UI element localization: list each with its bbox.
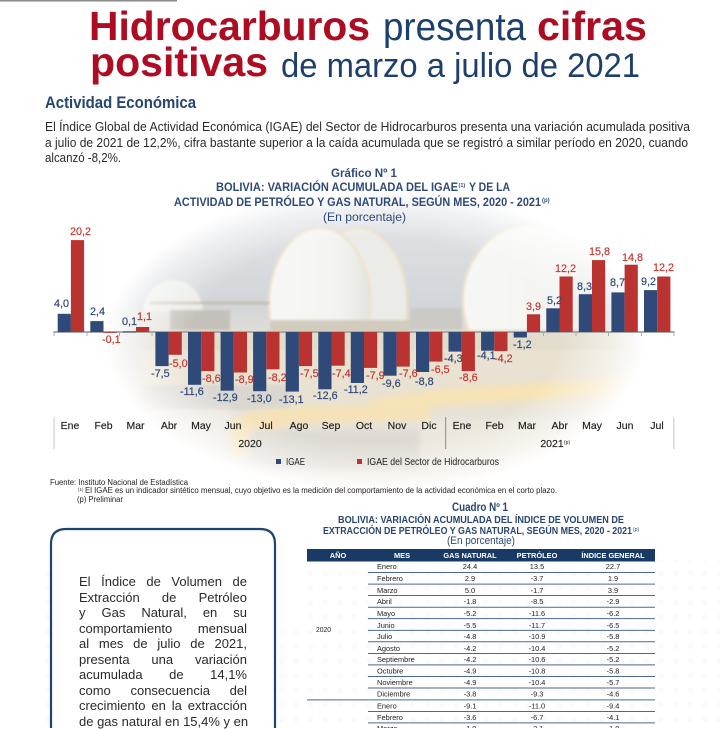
- month axis labels: Abr: [161, 420, 178, 432]
- table header: MES: [394, 551, 410, 560]
- IGAE value labels: -12,6: [313, 390, 338, 402]
- rows: -1.8: [464, 597, 476, 606]
- rows: -3.6: [464, 713, 476, 722]
- month axis labels: Ene: [61, 420, 79, 432]
- rows: -1.7: [531, 586, 543, 595]
- IGAE value labels: 8,7: [610, 277, 625, 289]
- rows: -5.8: [607, 666, 619, 676]
- sector value labels: -8,6: [459, 372, 478, 384]
- rows: -5.2: [607, 655, 619, 664]
- table header: GAS NATURAL: [443, 551, 497, 560]
- title: de marzo a julio de 2021: [281, 47, 640, 85]
- text box: Índice de Volumen: al mes de julio de 2021,: [79, 636, 247, 651]
- sector value labels: 20,2: [70, 226, 91, 238]
- IGAE value labels: 0,1: [122, 316, 137, 328]
- title: Hidrocarburos: [89, 3, 370, 49]
- text box: Índice de Volumen: crecimiento en la extracción: [79, 698, 247, 713]
- rows: -10.4: [529, 644, 545, 653]
- rows: -11.6: [529, 609, 545, 618]
- rows: -8.5: [531, 597, 543, 606]
- rows: -2.9: [607, 597, 619, 606]
- rows: Junio: [377, 621, 395, 630]
- rows: [377, 562, 620, 729]
- month axis labels: Oct: [356, 420, 372, 432]
- sector value labels: -8,9: [235, 374, 254, 386]
- rows: -9.4: [607, 702, 619, 710]
- rows: Febrero: [377, 713, 403, 722]
- month axis labels: 2020: [238, 438, 262, 450]
- chart heading: BOLIVIA: VARIACIÓN ACUMULADA DEL IGAE: [216, 179, 458, 194]
- rows: -6.7: [531, 713, 543, 722]
- rows: 13.5: [530, 562, 544, 571]
- text box: Índice de Volumen: comportamiento mensual: [79, 620, 247, 636]
- month axis labels: Ene: [453, 420, 471, 432]
- rows: Octubre: [377, 666, 403, 676]
- rows: 3.9: [608, 586, 618, 595]
- text box: Índice de Volumen: de gas natural en 15,4% y en: [79, 714, 248, 728]
- rows: Enero: [377, 702, 397, 710]
- IGAE value labels: 8,3: [577, 281, 592, 293]
- IGAE value labels: -4,1: [477, 350, 496, 362]
- IGAE value labels: -13,1: [279, 394, 304, 406]
- text box: Índice de Volumen: presenta una variación: [79, 652, 247, 666]
- sector value labels: -8,6: [202, 373, 221, 385]
- IGAE value labels: 9,2: [641, 276, 656, 288]
- sector value labels: 14,8: [622, 252, 643, 264]
- rows: 22.7: [606, 562, 620, 571]
- table header: [307, 549, 655, 562]
- rows: -9.1: [464, 702, 476, 710]
- rows: 5.0: [465, 586, 475, 595]
- month axis labels: Dic: [421, 420, 437, 432]
- month axis labels: Mar: [518, 420, 537, 432]
- month axis labels: Nov: [388, 420, 407, 432]
- source notes: [50, 478, 557, 504]
- text box: Índice de Volumen: Extracción de Petróleo: [79, 590, 247, 604]
- rows: Mayo: [377, 609, 395, 618]
- rows: Agosto: [377, 644, 400, 653]
- IGAE value labels: -12,9: [213, 392, 238, 404]
- sector value labels: -7,9: [366, 370, 385, 382]
- bar chart: IGAE vs IGAE hidrocarburos: [54, 226, 674, 468]
- sector value labels: 12,2: [555, 263, 576, 275]
- sector value labels: -4,2: [494, 353, 513, 365]
- rows: -4.6: [607, 690, 619, 698]
- sector value labels: -7,6: [399, 368, 418, 380]
- title: positivas: [90, 39, 268, 85]
- rows: Abril: [377, 597, 392, 606]
- sector value labels: [70, 226, 674, 386]
- month axis labels: Jun: [617, 420, 634, 432]
- sector value labels: -8,2: [268, 372, 287, 384]
- sector value labels: -7,5: [300, 368, 319, 380]
- rows: -4.9: [464, 678, 476, 687]
- rows: -10.8: [529, 666, 545, 676]
- month axis labels: Feb: [485, 420, 504, 432]
- table header: AÑO: [330, 551, 346, 560]
- text box: Índice de Volumen: y Gas Natural, en su: [79, 605, 247, 620]
- source notes: Fuente: Instituto Nacional de Estadística: [50, 478, 189, 487]
- IGAE value labels: 5,2: [547, 295, 562, 307]
- table heading: EXTRACCIÓN DE PETRÓLEO Y GAS NATURAL, SEGÚN MES, 2020 - 2021: [323, 524, 632, 537]
- rows: Enero: [377, 562, 397, 571]
- month axis labels: Jul: [259, 420, 273, 432]
- text box: Índice de Volumen: El Índice de Volumen de: [79, 574, 247, 589]
- chart heading: (En porcentaje): [323, 210, 406, 224]
- sector value labels: -6,5: [431, 364, 450, 376]
- rows: -4.8: [464, 632, 476, 641]
- rows: Marzo: [377, 586, 398, 595]
- rows: -6.5: [607, 621, 619, 630]
- month axis labels: (p): [564, 440, 570, 446]
- year label: 2020: [316, 625, 331, 634]
- IGAE value labels: -11,6: [180, 386, 204, 398]
- sector value labels: 1,1: [137, 311, 152, 323]
- source notes: (1): [78, 487, 84, 492]
- top rule: [0, 0, 177, 2]
- source notes: (p) Preliminar: [77, 495, 123, 504]
- rows: -11.0: [529, 702, 545, 710]
- source notes: El IGAE es un indicador sintético mensual, cuyo objetivo es la medición del comportamiento de la actividad económica en el corto plazo.: [85, 486, 557, 495]
- chart heading: ACTIVIDAD DE PETRÓLEO Y GAS NATURAL, SEGÚN MES, 2020 - 2021: [174, 194, 541, 209]
- rows: -9.3: [531, 690, 543, 698]
- month axis labels: Jul: [650, 420, 664, 432]
- rows: -5.5: [464, 621, 476, 630]
- table header: PETRÓLEO: [517, 551, 558, 560]
- IGAE value labels: -11,2: [344, 384, 368, 396]
- sector value labels: -5,0: [169, 358, 188, 370]
- rows: -4.2: [464, 644, 476, 653]
- sector value labels: -0,1: [102, 334, 121, 346]
- month axis labels: Mar: [126, 420, 145, 432]
- text box: Índice de Volumen: acumulada de 14,1%: [79, 667, 247, 682]
- rows: -3.7: [531, 574, 543, 583]
- rows: Diciembre: [377, 690, 410, 698]
- month axis labels: Ago: [290, 420, 308, 432]
- month axis labels: Abr: [552, 420, 568, 432]
- IGAE value labels: 4,0: [54, 298, 69, 310]
- rows: -4.2: [464, 655, 476, 664]
- chart heading: [174, 166, 550, 224]
- table heading: Cuadro Nº 1: [452, 502, 509, 514]
- rows: 1.9: [608, 574, 618, 583]
- rows: Septiembre: [377, 655, 415, 664]
- hydrocarbon sector bars: [71, 240, 670, 372]
- IGAE value labels: -4,3: [444, 353, 463, 365]
- rows: -10.6: [529, 655, 545, 664]
- data table: [307, 549, 655, 729]
- sector value labels: 12,2: [653, 262, 674, 274]
- month axis labels: Jun: [225, 420, 242, 432]
- rows: -6.2: [607, 609, 619, 618]
- table heading: [323, 502, 639, 547]
- title: cifras: [537, 3, 647, 49]
- table heading: (p): [633, 527, 639, 533]
- sector value labels: 3,9: [526, 301, 541, 313]
- intro paragraph: [45, 119, 691, 165]
- table heading: (En porcentaje): [447, 535, 515, 547]
- table heading: BOLIVIA: VARIACIÓN ACUMULADA DEL ÍNDICE DE VOLUMEN DE: [338, 513, 624, 526]
- rows: -5.2: [464, 609, 476, 618]
- rows: -11.7: [529, 621, 545, 630]
- chart heading: Gráfico Nº 1: [331, 166, 397, 180]
- IGAE value labels: -8,8: [415, 376, 434, 388]
- IGAE value labels: -7,5: [151, 368, 170, 380]
- IGAE value labels: [54, 276, 656, 406]
- month axis labels: 2021: [540, 438, 564, 450]
- intro paragraph: El Índice Global de Actividad Económica (IGAE) del Sector de Hidrocarburos presenta una variación acumulada positiva: [45, 119, 691, 134]
- rows: Febrero: [377, 574, 403, 583]
- dotted background texture: [40, 560, 720, 728]
- rows: -5.2: [607, 644, 619, 653]
- chart heading: Y DE LA: [469, 180, 510, 194]
- IGAE value labels: 2,4: [90, 306, 105, 318]
- rows: -4.9: [464, 666, 476, 676]
- rows: -10.4: [529, 678, 545, 687]
- rows: -10.9: [529, 632, 545, 641]
- legend: [276, 456, 499, 468]
- rows: -5.8: [607, 632, 619, 641]
- IGAE bars: [58, 290, 657, 392]
- table header: ÍNDICE GENERAL: [581, 551, 645, 560]
- text box: Índice de Volumen: [79, 574, 248, 728]
- text box outline: [51, 529, 275, 728]
- title: [89, 3, 647, 85]
- rows: -3.8: [464, 690, 476, 698]
- month axis labels: May: [582, 420, 603, 432]
- legend: IGAE del Sector de Hidrocarburos: [367, 456, 499, 468]
- IGAE value labels: -1,2: [513, 339, 532, 351]
- row rules: [307, 572, 655, 723]
- month axis labels: Feb: [94, 420, 113, 432]
- chart heading: (p): [542, 198, 550, 204]
- text box: Índice de Volumen: como consecuencia del: [79, 682, 247, 698]
- rows: Noviembre: [377, 678, 413, 687]
- rows: 24.4: [463, 562, 477, 571]
- chart heading: (1): [458, 183, 465, 189]
- axis: [54, 331, 674, 336]
- rows: 2.9: [465, 574, 475, 583]
- sector value labels: 15,8: [589, 246, 610, 258]
- rows: Julio: [377, 632, 392, 641]
- IGAE value labels: -13,0: [247, 393, 272, 405]
- background photo: refinery tanks: [119, 200, 631, 483]
- month axis labels: May: [191, 420, 212, 432]
- title: presenta: [383, 6, 526, 49]
- legend: IGAE: [286, 456, 305, 468]
- intro paragraph: alcanzó -8,2%.: [45, 150, 121, 165]
- rows: -4.1: [607, 713, 619, 722]
- rows: -5.7: [607, 678, 619, 687]
- IGAE value labels: -9,6: [382, 378, 401, 390]
- month axis labels: [54, 417, 674, 450]
- heading: Actividad Económica: Actividad Económica: [45, 93, 196, 112]
- month axis labels: Sep: [322, 420, 340, 432]
- sector value labels: -7,4: [332, 368, 351, 380]
